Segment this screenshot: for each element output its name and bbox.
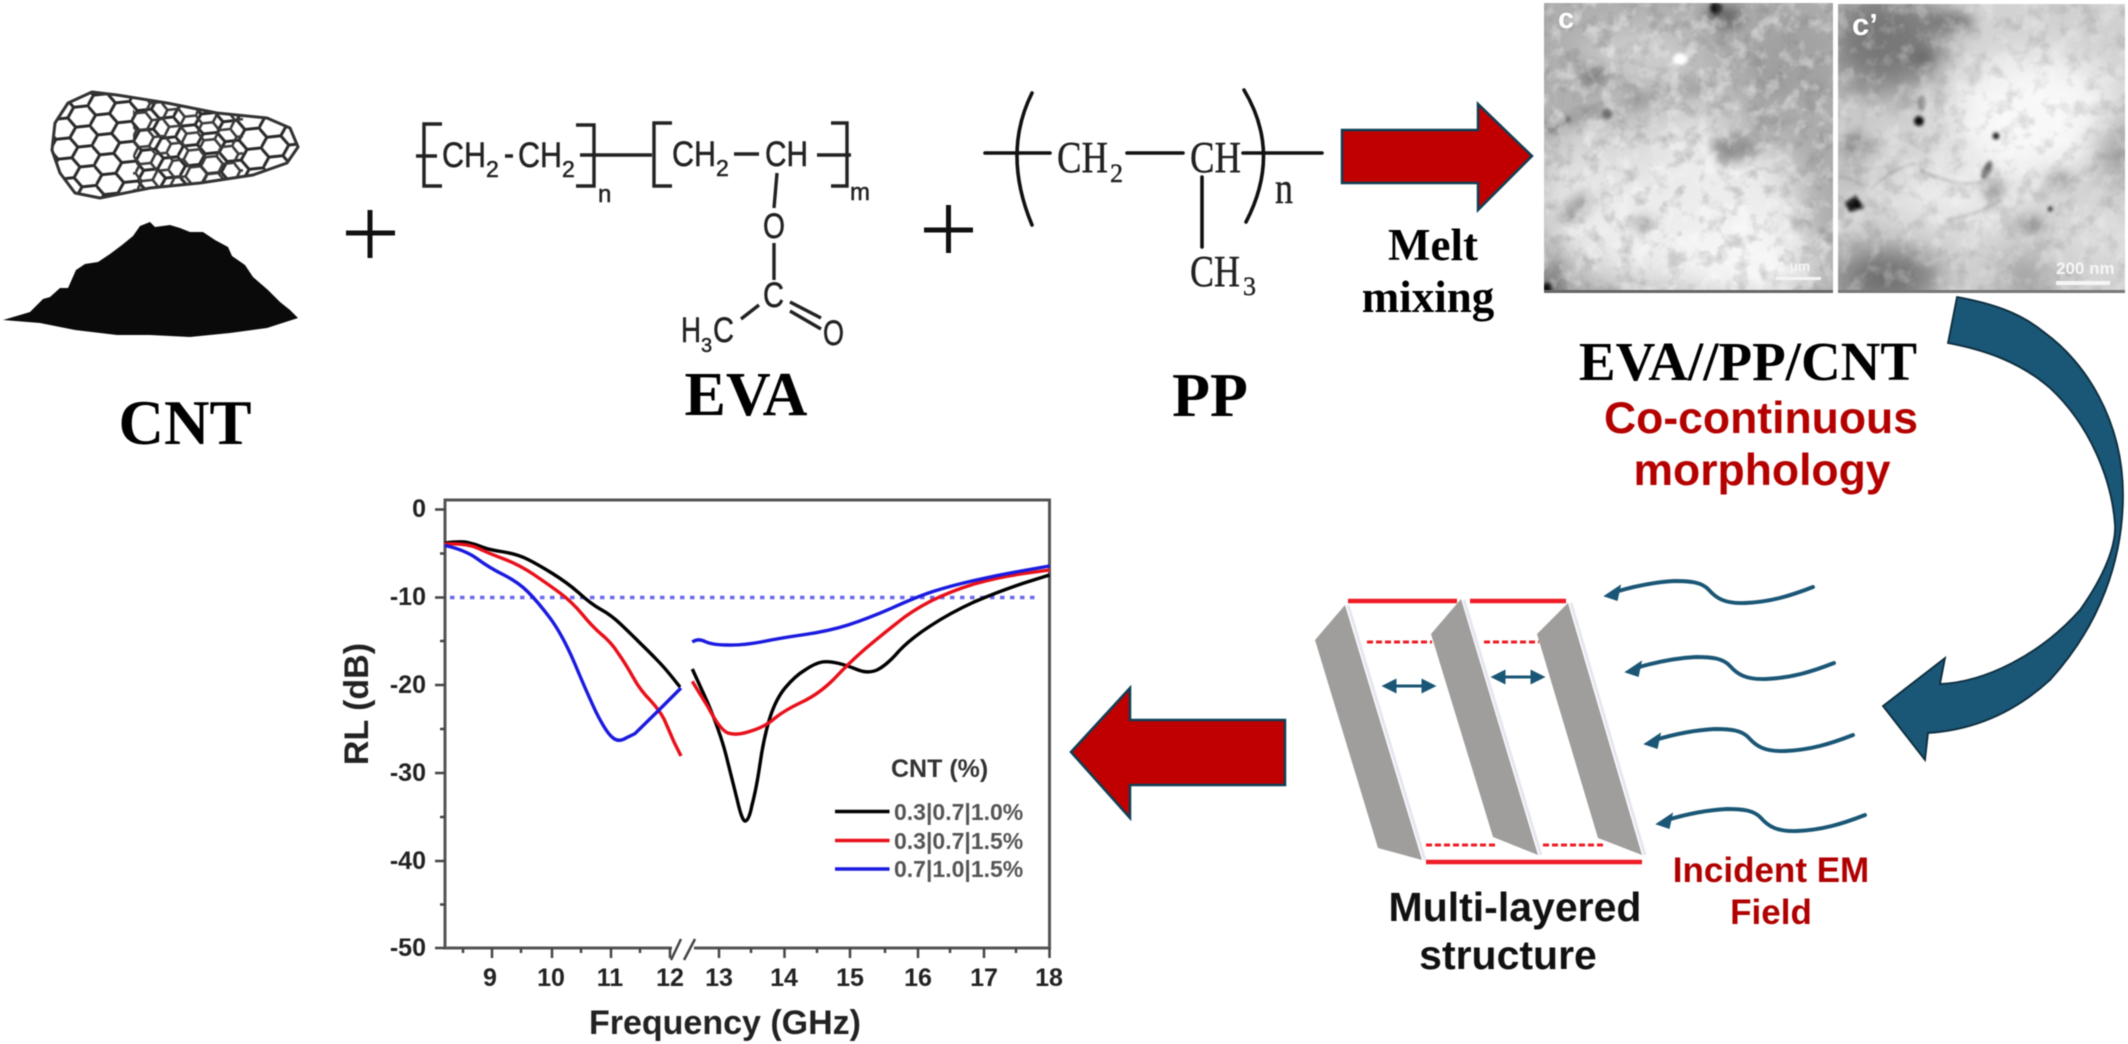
- wave arrow 2: [1626, 657, 1834, 679]
- -10 dB dotted reference: [450, 596, 1037, 599]
- EVA bonds and brackets: [416, 123, 851, 329]
- scale bar: 1 µm: [1776, 258, 1821, 280]
- axis ticks: [435, 510, 1050, 958]
- arrow: red left arrow: [1071, 688, 1285, 818]
- EVA formula text: H: [681, 311, 701, 350]
- label: Melt mixing: Melt: [1388, 220, 1478, 270]
- reflection loss chart: [338, 495, 1063, 1042]
- PP formula text: n: [1275, 164, 1293, 213]
- axis break: [671, 939, 695, 960]
- plus sign 1: [346, 210, 395, 258]
- panel label c': c’: [1852, 7, 1878, 42]
- scale bar: 200 nm: 200 nm: [2056, 259, 2115, 278]
- x axis tick labels: 18: [1035, 964, 1063, 992]
- blue series: [445, 546, 1050, 740]
- label: Multi-layered structure: Multi-layered: [1389, 884, 1641, 930]
- x axis tick labels: 11: [597, 964, 623, 992]
- EVA formula text: CH: [518, 136, 562, 175]
- grey layer 3: [1537, 603, 1642, 855]
- PP chemical structure: [985, 90, 1322, 430]
- EVA formula text: 2: [486, 156, 499, 182]
- EVA formula text: 3: [701, 335, 712, 357]
- PP formula text: 3: [1243, 272, 1256, 301]
- legend: CNT (%): [891, 755, 988, 783]
- PP bonds and parentheses: [985, 90, 1322, 247]
- heading: EVA//PP/CNT: EVA//PP/CNT: [1579, 331, 1917, 392]
- EVA formula text: O: [823, 314, 844, 353]
- scale bar: 1 µm: 1 µm: [1778, 258, 1810, 274]
- EVA formula text: n: [598, 181, 611, 208]
- heading: Co-continuous morphology: Co-continuous: [1604, 394, 1918, 443]
- legend: 0.7|1.0|1.5%: [894, 856, 1023, 882]
- label: Multi-layered structure: structure: [1419, 932, 1597, 978]
- label: PP: PP: [1172, 362, 1248, 430]
- x axis tick labels: 16: [904, 964, 932, 992]
- label: Melt mixing: mixing: [1362, 272, 1495, 322]
- EVA formula text: 2: [562, 156, 575, 182]
- axes frame: [445, 500, 1050, 948]
- x axis tick labels: 15: [836, 964, 864, 992]
- double arrows between layers: [1386, 677, 1541, 686]
- x axis tick labels: 9: [483, 964, 497, 992]
- arrow: melt mixing red arrow: [1342, 104, 1532, 210]
- TEM micrograph c: [1538, 2, 1840, 313]
- x axis tick labels: 10: [537, 964, 565, 992]
- legend: [835, 755, 1023, 882]
- layer highlight edges: [1348, 600, 1645, 860]
- wave arrow 4: [1657, 809, 1865, 831]
- EVA formula text: CH: [765, 135, 808, 174]
- x axis tick labels: 12: [656, 964, 684, 992]
- x axis tick labels: 13: [705, 964, 733, 992]
- grey layer 1: [1315, 605, 1422, 860]
- PP formula text: CH: [1057, 133, 1108, 182]
- PP formula text: [1057, 133, 1293, 301]
- red series: [445, 544, 1050, 756]
- y axis tick labels: -40: [390, 847, 426, 875]
- x axis tick labels: 17: [970, 964, 998, 992]
- EVA formula text: [442, 135, 870, 357]
- EVA formula text: C: [763, 276, 784, 315]
- y axis tick labels: -30: [390, 759, 426, 787]
- PP formula text: 2: [1110, 159, 1123, 188]
- EVA formula text: CH: [672, 135, 716, 174]
- wave arrow 1: [1605, 581, 1813, 603]
- x axis tick labels: 14: [770, 964, 798, 992]
- label: CNT: CNT: [118, 388, 252, 458]
- CNT group: nanotube and powder: [3, 85, 310, 458]
- label: EVA: EVA: [685, 361, 808, 429]
- legend: 0.3|0.7|1.5%: [894, 828, 1023, 854]
- legend: 0.3|0.7|1.0%: [894, 799, 1023, 825]
- label: Incident EM Field: Incident EM: [1673, 851, 1869, 890]
- icon: carbon nanotube: [50, 90, 300, 200]
- wave arrow 3: [1645, 729, 1853, 751]
- label: Incident EM Field: Field: [1730, 893, 1812, 932]
- grey layer 2: [1431, 599, 1538, 855]
- y axis title: RL (dB): [338, 643, 376, 765]
- incident EM field wave arrows: [1605, 581, 1865, 831]
- y axis tick labels: -10: [390, 583, 426, 611]
- plus sign 2: [924, 205, 973, 253]
- y axis tick labels: [390, 495, 426, 962]
- EVA formula text: CH: [442, 136, 486, 175]
- panel label c: c: [1558, 3, 1574, 35]
- x axis title: Frequency (GHz): [589, 1004, 861, 1042]
- black series: [445, 542, 1050, 821]
- EVA formula text: m: [850, 179, 870, 206]
- x axis tick labels: [483, 964, 1063, 992]
- red top and bottom edges: [1348, 601, 1642, 862]
- arrow: curved blue arrow: [1883, 297, 2123, 760]
- heading: Co-continuous morphology: morphology: [1633, 446, 1891, 495]
- EVA formula text: 2: [716, 155, 729, 181]
- PP formula text: CH: [1190, 247, 1240, 296]
- y axis tick labels: 0: [412, 495, 426, 523]
- icon: CNT powder pile: [3, 222, 298, 337]
- multi-layered structure diagram: [1315, 599, 1645, 978]
- PP formula text: CH: [1190, 133, 1241, 182]
- EVA chemical structure: [416, 123, 870, 429]
- TEM micrograph c prime: [1825, 0, 2128, 308]
- EVA formula text: C: [713, 311, 734, 350]
- EVA formula text: O: [763, 207, 785, 246]
- y axis tick labels: -20: [390, 671, 426, 699]
- y axis tick labels: -50: [390, 934, 426, 962]
